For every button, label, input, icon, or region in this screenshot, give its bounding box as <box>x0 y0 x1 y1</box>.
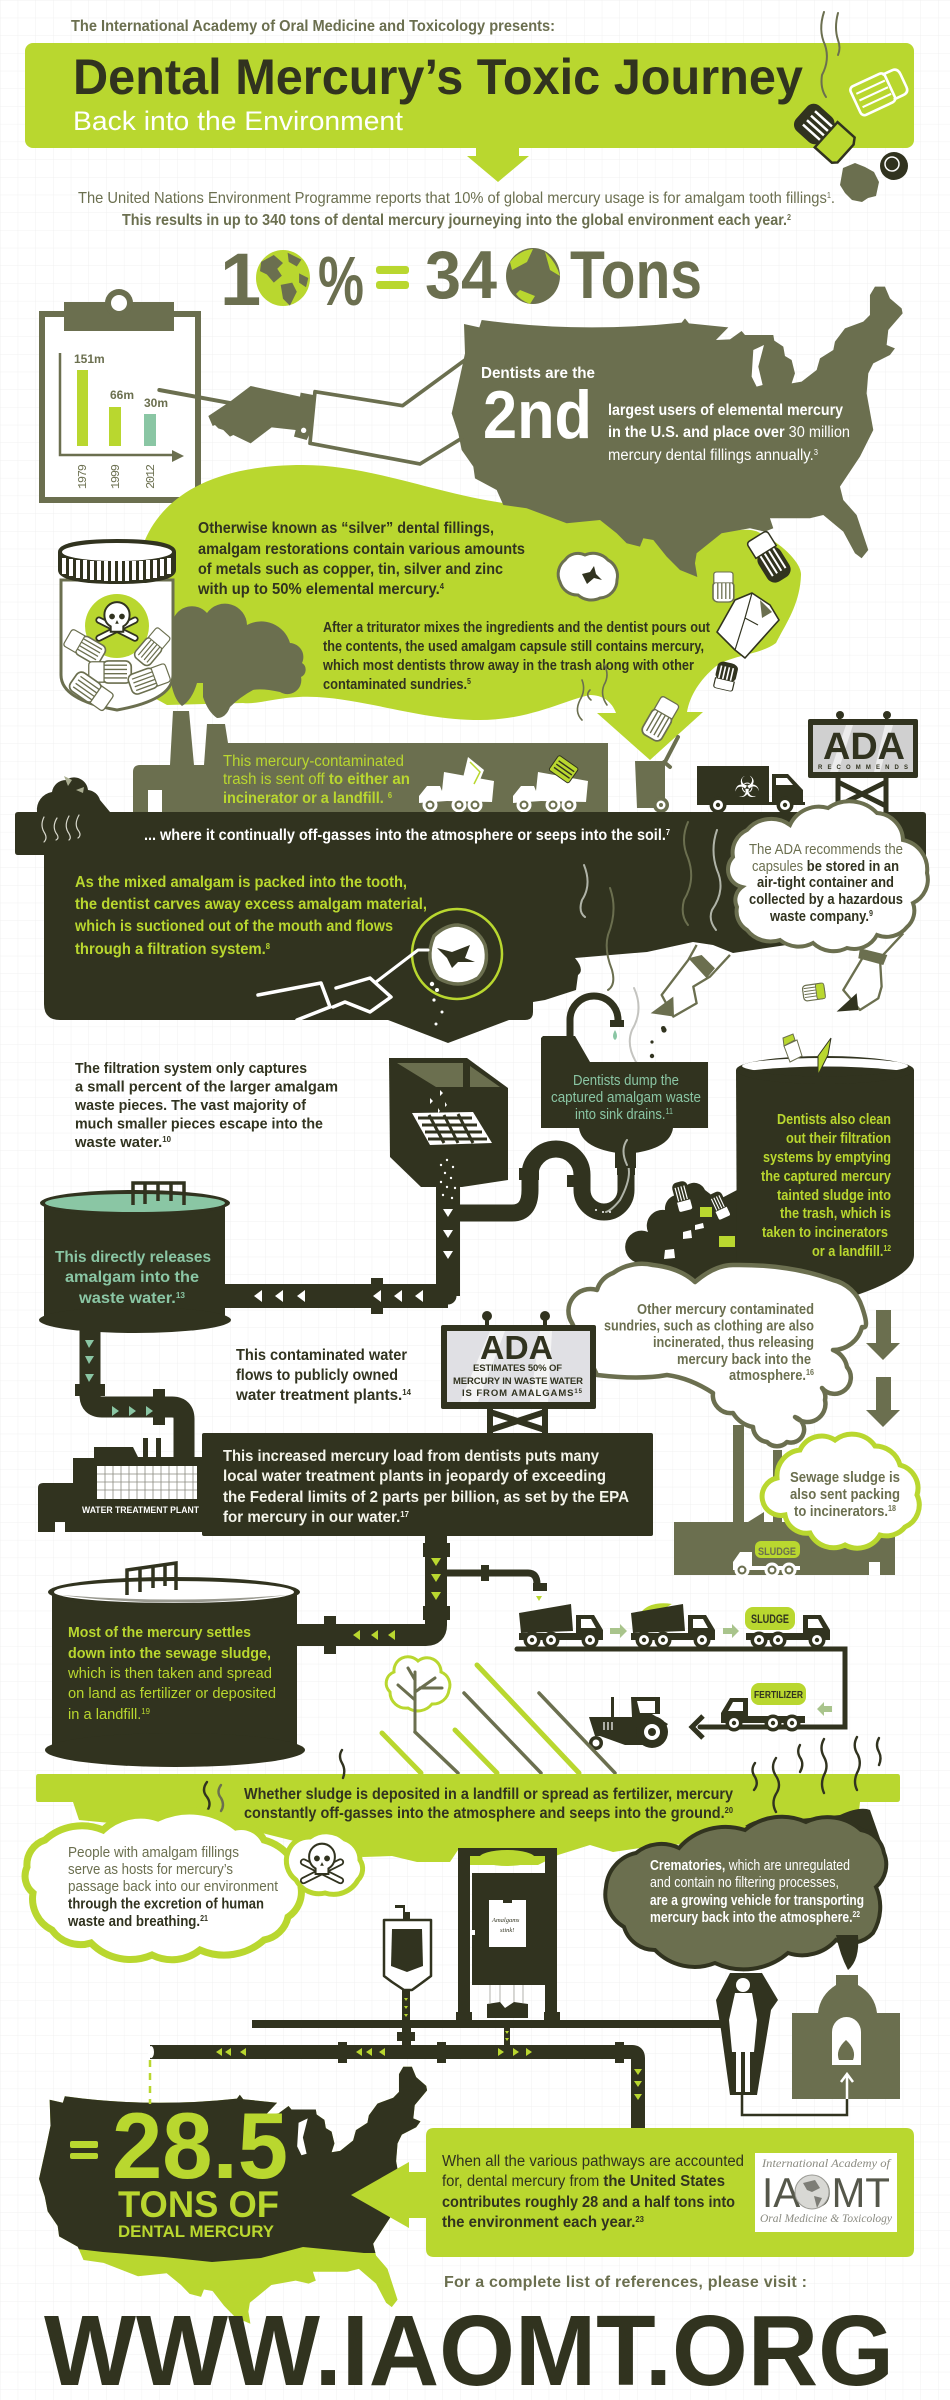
carving text: As the mixed amalgam is packed into the tooth, <box>75 874 407 891</box>
icon: capsules and coat <box>640 530 794 743</box>
carving text: through a filtration system. <box>75 941 275 958</box>
smoke cloud <box>172 604 306 718</box>
waste water tank <box>39 1183 231 1333</box>
ADA estimates sign: ADA <box>480 1329 553 1366</box>
logo: IAOMT: IAOMT <box>762 2169 890 2216</box>
text: contaminated water: flows to publicly owned <box>236 1367 398 1384</box>
conclusion text: 23 <box>635 2215 645 2224</box>
note on door <box>489 1898 526 1947</box>
band text: 7 <box>666 828 671 837</box>
bottom map: 28.5 tons: DENTAL MERCURY <box>118 2222 275 2241</box>
pipe to water treatment plant <box>75 1330 184 1470</box>
note on door: stink! <box>500 1927 514 1934</box>
cloud text: 16 <box>806 1368 814 1377</box>
logo: IAOMT: International Academy of <box>761 2156 892 2170</box>
cloud: crematories: and contain no filtering processes, <box>650 1875 839 1891</box>
waste pile beside sludge tank <box>625 1180 737 1295</box>
icon: tooth in small cloud <box>558 553 617 600</box>
icon: lab coat <box>717 593 779 658</box>
off-gas squiggles <box>42 815 80 842</box>
cloud: sewage sludge: also sent packing <box>790 1487 900 1503</box>
filtration text <box>74 1060 338 1151</box>
ADA recommendation cloud: capsules be stored in an <box>752 859 899 875</box>
flow arrows <box>610 1624 832 1716</box>
pipes to sewage tank <box>297 1536 547 1654</box>
sink text: 11 <box>666 1107 673 1116</box>
headline stat: 10% = 340 tons: 1 <box>220 238 261 321</box>
filter hopper <box>389 1058 508 1199</box>
cloud: sewage sludge <box>762 1434 919 1548</box>
cloud: crematories: 22 <box>853 1910 860 1919</box>
sewage text: which is then taken and spread <box>67 1665 272 1682</box>
truck: fertilizer <box>721 1683 806 1732</box>
note on door: Amalgams <box>491 1917 520 1924</box>
truck route <box>517 1603 845 1738</box>
tank text: 12 <box>883 1244 891 1253</box>
trash bin <box>635 737 678 813</box>
clipboard bar chart: 30m <box>144 396 168 410</box>
tank text: or a landfill. <box>812 1243 896 1260</box>
text: silver fillings: of metals such as copper, tin, silver and zinc <box>198 561 503 578</box>
map text: in the U.S. and place over 30 million <box>608 424 850 441</box>
ADA estimates sign <box>441 1311 596 1434</box>
sludge tank with text <box>736 1034 914 1295</box>
icon: toilet stall <box>456 1848 560 2021</box>
map text: Dentists are the <box>481 365 595 382</box>
map of United States with dentists stat <box>452 287 903 577</box>
intro text: . <box>831 190 835 207</box>
carving text: 8 <box>266 942 271 951</box>
pipes: filter to waste water tank <box>225 1135 635 1314</box>
sludge truck at incinerator: SLUDGE <box>758 1546 796 1558</box>
water treatment plant: WATER TREATMENT PLANT <box>82 1505 199 1516</box>
cloud: people with fillings <box>25 1811 301 1960</box>
filtration text: a small percent of the larger amalgam <box>75 1078 338 1096</box>
jar of capsules <box>58 539 176 712</box>
ADA recommendation cloud: 9 <box>869 909 873 918</box>
factory text: incinerator or a landfill. <box>223 790 394 807</box>
panel: EPA limits: the Federal limits of 2 parts per billion, as set by the EPA <box>223 1489 629 1506</box>
ADA recommendation cloud: waste company. <box>770 909 881 925</box>
filtration text: much smaller pieces escape into the <box>75 1116 323 1132</box>
tank text: systems by emptying <box>763 1149 891 1166</box>
ADA recommends sign <box>808 711 918 814</box>
text: triturator: After a triturator mixes the ingredients and the dentist pours out <box>323 620 710 636</box>
icon: spilled amalgam capsule <box>790 12 910 202</box>
map text: mercury dental fillings annually. <box>608 447 823 464</box>
arrows down to incinerator <box>866 1310 900 1427</box>
icon: hand holding dental tool <box>159 360 465 464</box>
sink text: Dentists dump the <box>573 1073 679 1089</box>
ADA recommends sign: ADA <box>823 726 905 768</box>
intro text: 2 <box>787 213 791 222</box>
cloud: sewage sludge: Sewage sludge is <box>790 1470 900 1486</box>
carving text <box>74 874 427 958</box>
factory text <box>223 753 410 807</box>
text: silver fillings: amalgam restorations contain various amounts <box>198 541 525 558</box>
cloud text: Other mercury contaminated <box>637 1302 814 1318</box>
rising vapour lines <box>581 822 721 1062</box>
presenter line: The International Academy of Oral Medicine and Toxicology presents: <box>71 18 555 35</box>
title banner <box>25 43 914 182</box>
bottom map: 28.5 tons <box>39 2060 427 2324</box>
clipboard bar chart <box>42 289 198 500</box>
truck: sludge: SLUDGE <box>751 1614 789 1626</box>
map text: 2nd <box>483 377 592 453</box>
factory text: 6 <box>388 791 393 800</box>
ADA estimates sign: ESTIMATES 50% OF <box>473 1363 562 1374</box>
green blob background <box>120 465 801 760</box>
capsule and filter going into tank <box>783 1034 831 1075</box>
tank text: Dentists also clean <box>777 1111 891 1128</box>
cloud: other sundries <box>568 1264 866 1446</box>
sludge truck at incinerator <box>733 1541 800 1578</box>
conclusion text: the environment each year. <box>442 2214 642 2231</box>
icon: crematorium <box>792 1975 900 2099</box>
green band: off-gassing: Whether sludge is deposited in a landfill or spread as fertilizer, mercury <box>244 1786 733 1803</box>
cloud: crematories: are a growing vehicle for transporting <box>650 1893 864 1909</box>
panel: EPA limits: local water treatment plants in jeopardy of exceeding <box>223 1468 606 1485</box>
filtration text: The filtration system only captures <box>75 1060 307 1077</box>
cloud: crematories: mercury back into the atmosphere. <box>650 1910 891 1926</box>
ADA estimates sign: MERCURY IN WASTE WATER <box>453 1376 583 1387</box>
tank text <box>55 1249 211 1307</box>
cloud: people with fillings: People with amalgam fillings <box>68 1844 239 1861</box>
text: contaminated water: 14 <box>402 1388 412 1397</box>
icon: tractor <box>589 1697 668 1750</box>
truck: fertilizer: FERTILIZER <box>754 1689 803 1701</box>
cloud: sewage sludge: 18 <box>888 1504 896 1513</box>
tank text: 13 <box>176 1291 186 1300</box>
cloud: people with fillings: through the excretion of human <box>68 1896 264 1912</box>
panel: EPA limits: 17 <box>400 1510 410 1519</box>
bottom map: 28.5 tons: TONS OF <box>118 2184 279 2225</box>
carving text: which is suctioned out of the mouth and flows <box>74 918 393 935</box>
logo: IAOMT <box>755 2153 897 2232</box>
text: contaminated water: water treatment plants. <box>236 1387 406 1404</box>
cloud: people with fillings: serve as hosts for mercury’s <box>68 1861 233 1878</box>
tank text <box>761 1111 892 1260</box>
map text <box>481 365 850 464</box>
text: silver fillings: with up to 50% elemental mercury. <box>198 581 451 598</box>
cloud text: atmosphere. <box>729 1368 815 1384</box>
clipboard bar chart: 2012 <box>144 464 158 489</box>
water treatment plant <box>38 1438 202 1532</box>
text: triturator: 5 <box>467 677 471 686</box>
text: silver fillings: 4 <box>440 582 445 591</box>
cloud text: incinerated, thus releasing <box>653 1335 814 1351</box>
logo: IAOMT: Oral Medicine & Toxicology <box>760 2211 893 2225</box>
skull cloud <box>286 1832 363 1894</box>
tank text: the trash, which is <box>780 1205 891 1222</box>
conclusion text: contributes roughly 28 and a half tons into <box>442 2194 735 2211</box>
sewage text: in a landfill. <box>68 1706 143 1723</box>
pipes: waste to environment <box>148 2020 721 2130</box>
vapour squiggles over band <box>204 1737 880 1812</box>
text: triturator <box>322 620 710 693</box>
filtration text: waste water. <box>75 1134 163 1151</box>
tank text: the captured mercury <box>761 1168 892 1185</box>
clipboard bar chart: 66m <box>110 388 134 402</box>
cloud: crematories: Crematories, which are unregulated <box>650 1858 850 1874</box>
text: silver fillings <box>197 520 525 598</box>
text: triturator: the contents, the used amalgam capsule still contains mercury, <box>323 639 704 655</box>
panel: EPA limits: for mercury in our water. <box>223 1509 405 1526</box>
factory with trucks <box>133 664 608 812</box>
tank text: amalgam into the <box>65 1269 199 1286</box>
tank text: tainted sludge into <box>777 1187 891 1204</box>
panel: EPA limits <box>202 1433 653 1536</box>
sewage text: on land as fertilizer or deposited <box>68 1685 276 1702</box>
pile of waste, left <box>37 776 110 812</box>
factory text: This mercury-contaminated <box>223 753 404 770</box>
sink text: into sink drains. <box>575 1107 676 1123</box>
band text: ... where it continually off-gasses into the atmosphere or seeps into the soil. <box>144 827 704 844</box>
panel: conclusion with arrow <box>351 2128 914 2257</box>
tank text: out their filtration <box>786 1130 891 1147</box>
carving text: the dentist carves away excess amalgam material, <box>75 896 427 913</box>
clipboard bar chart: 1999 <box>109 464 123 489</box>
ADA recommendation cloud <box>728 801 928 951</box>
icon: coffin with person <box>716 1973 847 2115</box>
cloud: sewage sludge: to incinerators. <box>794 1504 899 1520</box>
filtration text: waste pieces. The vast majority of <box>74 1097 307 1114</box>
icon: urinal <box>384 1905 431 2022</box>
sewage text: down into the sewage sludge, <box>68 1645 271 1662</box>
hands with cone-shaped filters <box>651 933 903 1031</box>
green band: off-gassing <box>36 1774 900 1865</box>
cloud text: mercury back into the <box>677 1352 811 1368</box>
green band: off-gassing: constantly off-gasses into the atmosphere and seeps into the ground. <box>244 1805 758 1822</box>
map text: largest users of elemental mercury <box>608 402 843 419</box>
truck: empty <box>519 1604 603 1648</box>
truck: sludge <box>745 1607 830 1648</box>
factory text: trash is sent off to either an <box>223 771 410 788</box>
headline stat: 10% = 340 tons: 34 <box>425 237 497 313</box>
clipboard bar chart: 1979 <box>76 464 90 489</box>
text: triturator: which most dentists throw away in the trash along with other <box>322 658 694 674</box>
sewage tank with text <box>45 1563 305 1767</box>
references line: For a complete list of references, please visit : <box>444 2274 807 2291</box>
tank text: waste water. <box>79 1290 173 1307</box>
cloud text: sundries, such as clothing are also <box>604 1318 814 1334</box>
text: contaminated water: This contaminated water <box>236 1347 407 1364</box>
sewage text: Most of the mercury settles <box>68 1624 251 1641</box>
text: contaminated water <box>235 1347 412 1404</box>
title: Dental Mercury’s Toxic Journey <box>73 49 803 105</box>
chimney and incinerator <box>674 1425 895 1575</box>
tank text: taken to incinerators <box>762 1224 888 1241</box>
headline stat: 10% = 340 tons <box>220 237 702 321</box>
cloud: crematories <box>605 1809 886 1970</box>
ADA recommendation cloud: collected by a hazardous <box>749 892 903 908</box>
sewage text <box>67 1624 276 1723</box>
sink text: captured amalgam waste <box>551 1090 701 1106</box>
cloud text <box>604 1302 814 1384</box>
ADA estimates sign: IS FROM AMALGAMS <box>462 1388 574 1399</box>
subtitle: Back into the Environment <box>73 106 404 136</box>
panel: EPA limits: This increased mercury load from dentists puts many <box>223 1448 599 1465</box>
tank text: This directly releases <box>55 1249 211 1266</box>
text: triturator: contaminated sundries. <box>323 677 486 693</box>
ADA recommends sign: RECOMMENDS <box>818 765 908 771</box>
headline stat: 10% = 340 tons: % <box>318 242 364 320</box>
truck: loaded <box>631 1603 715 1648</box>
ADA recommendation cloud: The ADA recommends the <box>749 842 903 858</box>
sink with faucet <box>541 996 708 1168</box>
green band: off-gassing: 20 <box>725 1806 734 1815</box>
sink text <box>551 1073 701 1123</box>
dark panel: off-gassing and amalgam carving <box>15 812 926 1043</box>
headline stat: 10% = 340 tons: Tons <box>570 237 702 313</box>
conclusion text <box>442 2153 744 2231</box>
bottom map: 28.5 tons: 28.5 <box>112 2093 288 2198</box>
filtration text: 10 <box>162 1135 172 1144</box>
intro text <box>78 190 835 229</box>
sewage text: 19 <box>141 1707 151 1716</box>
conclusion text: for, dental mercury from the United States <box>442 2173 725 2190</box>
intro text: This results in up to 340 tons of dental mercury journeying into the global environment each year. <box>122 212 864 229</box>
intro text: 1 <box>827 191 831 200</box>
icon: tooth in ring with tool <box>258 909 502 1026</box>
cloud: people with fillings: 21 <box>200 1914 208 1923</box>
map text: 3 <box>814 448 819 457</box>
cloud: people with fillings: waste and breathing. <box>68 1913 217 1930</box>
cloud: people with fillings: passage back into our environment <box>68 1878 279 1895</box>
clipboard bar chart: 151m <box>74 352 105 366</box>
ADA recommendation cloud: air-tight container and <box>757 875 894 891</box>
ADA estimates sign: 15 <box>574 1389 583 1395</box>
biohazard truck: ☣ <box>734 770 760 804</box>
text: silver fillings: Otherwise known as “silver” dental fillings, <box>198 520 494 537</box>
conclusion text: When all the various pathways are accounted <box>442 2153 744 2170</box>
intro text: The United Nations Environment Programme reports that 10% of global mercury usage is for amalgam tooth fillings <box>78 190 893 207</box>
biohazard truck <box>697 766 805 814</box>
tree and field lines <box>382 1657 615 1773</box>
